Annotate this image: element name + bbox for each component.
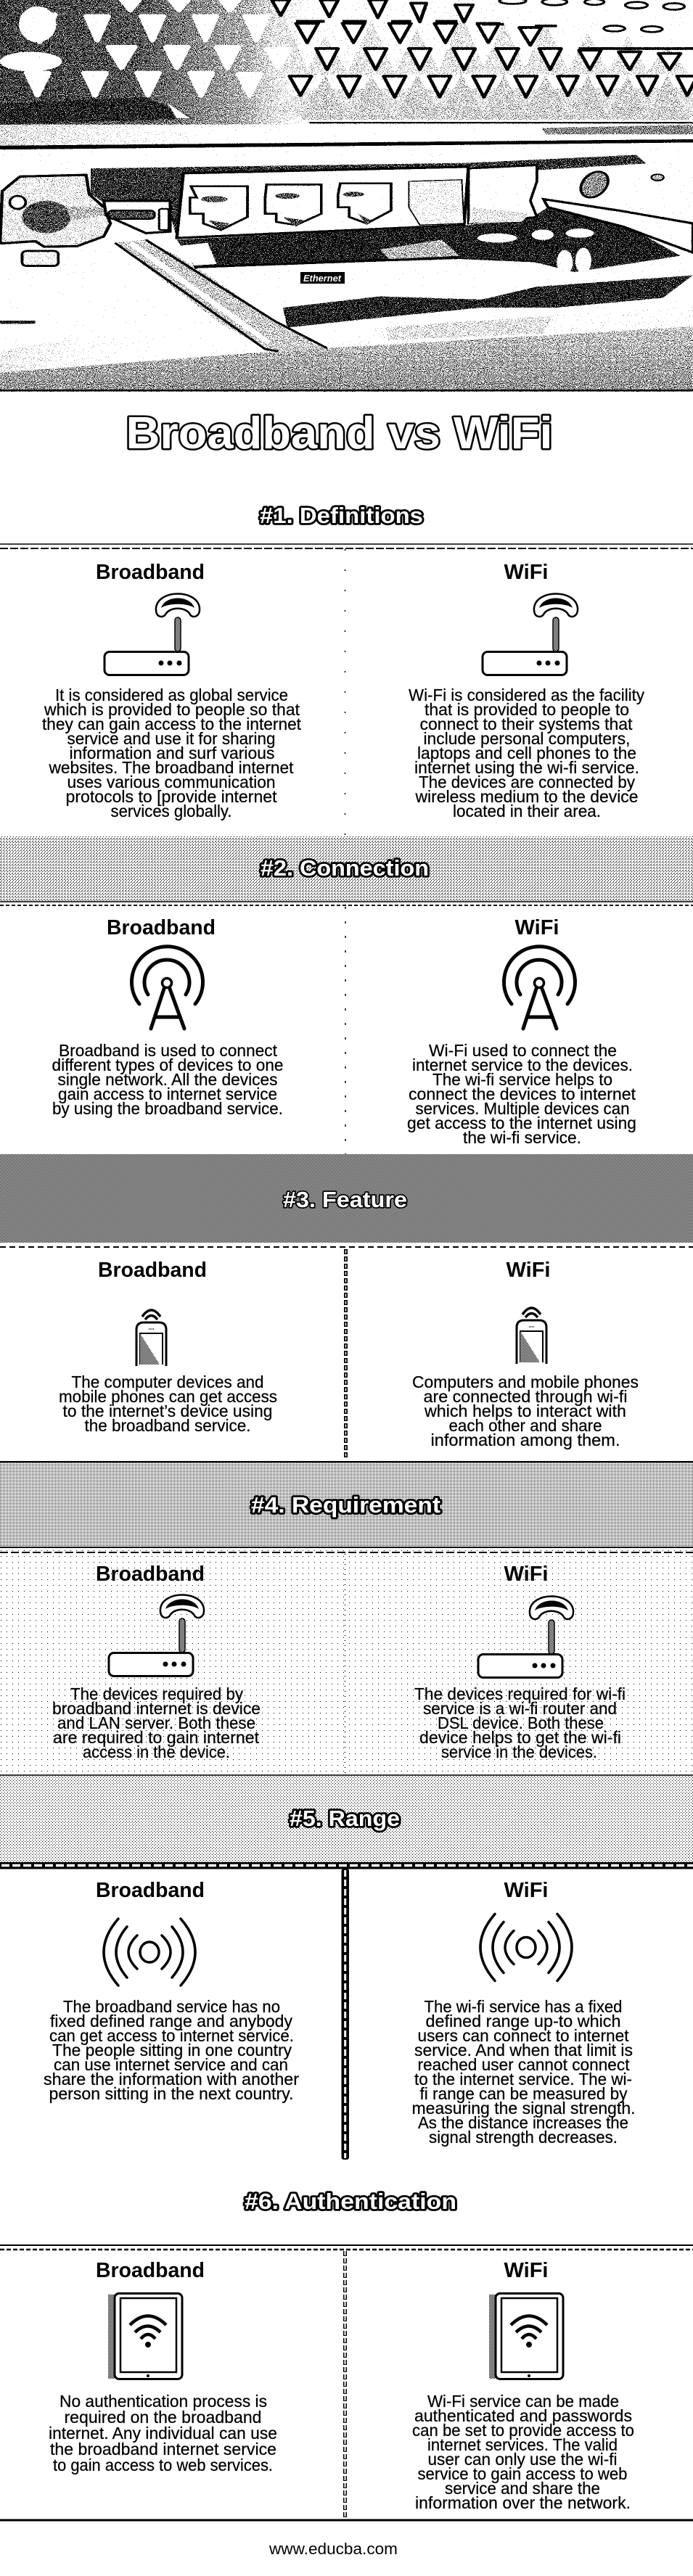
panel background: requirement bbox=[0, 1548, 693, 1775]
description text: The broadband service has no bbox=[63, 1997, 280, 2016]
section heading: Feature: #3. Feature bbox=[283, 1187, 407, 1212]
description text: can use internet service and can bbox=[54, 2055, 288, 2074]
description text: internet services. The valid bbox=[427, 2435, 618, 2454]
description text: wireless medium to the device bbox=[415, 787, 639, 806]
description text: each other and share bbox=[448, 1416, 602, 1435]
panel: connection wifi bbox=[407, 916, 636, 1147]
description text: which is provided to people so that bbox=[44, 700, 300, 719]
description text: fixed defined range and anybody bbox=[50, 2012, 292, 2030]
band: range heading background bbox=[0, 1776, 693, 1862]
description text: fi range can be measured by bbox=[419, 2084, 628, 2103]
section heading: Range: #5. Range bbox=[290, 1806, 400, 1831]
column heading: WiFi bbox=[504, 2259, 549, 2282]
description text bbox=[42, 686, 302, 820]
description text bbox=[44, 1997, 299, 2103]
band: requirement heading background bbox=[0, 1462, 693, 1547]
description text: different types of devices to one bbox=[52, 1055, 283, 1074]
description text: information over the network. bbox=[415, 2493, 631, 2512]
column heading: WiFi bbox=[504, 561, 549, 584]
band: feature heading background bbox=[0, 1154, 693, 1243]
column heading: WiFi bbox=[507, 1259, 550, 1282]
panel: range broadband bbox=[44, 1879, 299, 2103]
panel: range wifi bbox=[412, 1879, 636, 2147]
description text: service is a wi-fi router and bbox=[423, 1699, 617, 1718]
icon: wifi router bbox=[478, 1596, 573, 1677]
description text bbox=[412, 2392, 634, 2512]
description text: are required to gain internet bbox=[53, 1728, 260, 1747]
description text: service. And when that limit is bbox=[414, 2041, 633, 2059]
description text: No authentication process is bbox=[60, 2392, 267, 2411]
icon: broadcast signal bbox=[104, 1919, 195, 1986]
description text: and LAN server. Both these bbox=[57, 1713, 255, 1732]
section heading: Definitions: #1. Definitions bbox=[260, 503, 423, 528]
description text: user can only use the wi-fi bbox=[428, 2450, 617, 2469]
description text: signal strength decreases. bbox=[429, 2128, 618, 2147]
description text: authenticated and passwords bbox=[414, 2406, 632, 2425]
description text: Broadband is used to connect bbox=[59, 1041, 278, 1060]
description text: are connected through wi-fi bbox=[424, 1387, 627, 1406]
description text: gain access to internet service bbox=[58, 1085, 277, 1103]
description text: measuring the signal strength. bbox=[412, 2099, 636, 2118]
description text: to the internet service. The wi- bbox=[414, 2070, 632, 2089]
description text bbox=[409, 686, 644, 820]
description text: The wi-fi service helps to bbox=[432, 1070, 612, 1089]
description text: service and use it for sharing bbox=[67, 729, 276, 748]
column heading: Broadband bbox=[107, 916, 216, 939]
column heading: Broadband bbox=[96, 1879, 205, 1902]
description text: device helps to get the wi-fi bbox=[419, 1728, 621, 1747]
description text: that is provided to people to bbox=[425, 700, 629, 719]
description text: Wi-Fi service can be made bbox=[427, 2392, 619, 2411]
panel: requirement wifi bbox=[414, 1563, 626, 1761]
description text: the broadband internet service bbox=[50, 2440, 276, 2458]
description text: which helps to interact with bbox=[424, 1402, 626, 1420]
icon: mobile phone with signal bbox=[136, 1310, 166, 1366]
description text: internet. Any individual can use bbox=[49, 2424, 277, 2443]
icon: radio tower bbox=[504, 947, 575, 1029]
description text: connect to their systems that bbox=[419, 715, 633, 733]
icon: wifi router bbox=[109, 1594, 204, 1676]
description text: The people sitting in one country bbox=[52, 2041, 292, 2059]
icon: radio tower bbox=[132, 947, 203, 1029]
description text: information and surf various bbox=[70, 744, 274, 762]
column heading: Broadband bbox=[96, 1563, 205, 1586]
footer: website: www.educba.com bbox=[268, 2540, 398, 2558]
description text: laptops and cell phones to the bbox=[417, 744, 636, 762]
column heading: Broadband bbox=[98, 1259, 207, 1282]
panel: definitions broadband bbox=[42, 561, 302, 820]
description text: Computers and mobile phones bbox=[412, 1373, 639, 1391]
description text: the broadband service. bbox=[84, 1416, 251, 1435]
panel: feature wifi bbox=[412, 1259, 639, 1449]
description text bbox=[407, 1041, 636, 1147]
band: connection heading background bbox=[0, 836, 693, 901]
panel: authentication wifi bbox=[412, 2259, 634, 2512]
column heading: Broadband bbox=[96, 2259, 205, 2282]
description text: services globally. bbox=[110, 802, 232, 820]
description text bbox=[49, 2392, 277, 2474]
description text bbox=[52, 1684, 261, 1761]
description text: person sitting in the next country. bbox=[49, 2084, 293, 2103]
description text: access in the device. bbox=[83, 1742, 230, 1761]
description text: service and share the bbox=[445, 2479, 600, 2498]
description text bbox=[52, 1041, 283, 1118]
description text: required on the broadband bbox=[64, 2408, 262, 2427]
icon: broadcast signal bbox=[480, 1914, 572, 1980]
description text: protocols to [provide internet bbox=[65, 787, 277, 806]
description text: mobile phones can get access bbox=[59, 1387, 277, 1406]
description text: connect the devices to internet bbox=[409, 1085, 636, 1103]
title: Broadband vs WiFi bbox=[126, 408, 553, 458]
description text: internet service to the devices. bbox=[412, 1055, 633, 1074]
description text: information among them. bbox=[431, 1431, 620, 1449]
description text: reached user cannot connect bbox=[418, 2055, 630, 2074]
description text: Wi-Fi used to connect the bbox=[429, 1041, 617, 1060]
description text: The devices are connected by bbox=[419, 773, 635, 791]
description text: by using the broadband service. bbox=[52, 1099, 283, 1118]
column heading: WiFi bbox=[504, 1563, 549, 1586]
description text: can be set to provide access to bbox=[412, 2421, 634, 2440]
icon: wifi router bbox=[104, 593, 200, 675]
description text: The devices required by bbox=[70, 1684, 243, 1703]
description text: broadband internet is device bbox=[52, 1699, 261, 1718]
description text: The computer devices and bbox=[71, 1373, 264, 1391]
hero photo: router ethernet ports bbox=[0, 0, 693, 392]
description text: DSL device. Both these bbox=[438, 1713, 604, 1732]
description text: single network. All the devices bbox=[58, 1070, 277, 1089]
description text: users can connect to internet bbox=[418, 2026, 629, 2045]
description text: websites. The broadband internet bbox=[49, 758, 294, 777]
description text: they can gain access to the internet bbox=[42, 715, 302, 733]
panel: authentication broadband bbox=[49, 2259, 277, 2474]
description text bbox=[412, 1997, 636, 2147]
description text: As the distance increases the bbox=[418, 2113, 628, 2132]
icon: mobile phone with signal bbox=[517, 1308, 546, 1364]
column heading: WiFi bbox=[515, 916, 559, 939]
panel: connection broadband bbox=[52, 916, 283, 1118]
section heading: Authentication: #6. Authentication bbox=[245, 2189, 456, 2214]
panel: definitions wifi bbox=[409, 561, 644, 820]
description text: the wi-fi service. bbox=[463, 1128, 581, 1147]
description text: to gain access to web services. bbox=[53, 2456, 273, 2474]
label: Ethernet: Ethernet bbox=[303, 273, 342, 284]
description text: services. Multiple devices can bbox=[415, 1099, 630, 1118]
description text: can get access to internet service. bbox=[49, 2026, 294, 2045]
description text: uses various communication bbox=[67, 773, 276, 791]
icon: wifi router bbox=[483, 593, 578, 675]
description text: located in their area. bbox=[453, 802, 601, 820]
description text: get access to the internet using bbox=[407, 1114, 636, 1132]
description text: The devices required for wi-fi bbox=[414, 1684, 626, 1703]
section heading: Requirement: #4. Requirement bbox=[251, 1492, 440, 1518]
description text: include personal computers, bbox=[424, 729, 630, 748]
description text: share the information with another bbox=[44, 2070, 299, 2089]
description text: It is considered as global service bbox=[55, 686, 288, 704]
column heading: WiFi bbox=[504, 1879, 549, 1902]
panel: requirement broadband bbox=[52, 1563, 261, 1761]
section heading: Connection: #2. Connection bbox=[261, 855, 429, 881]
column heading: Broadband bbox=[96, 561, 205, 584]
description text: to the internet’s device using bbox=[62, 1402, 273, 1420]
icon: tablet with wifi bbox=[108, 2294, 182, 2379]
description text: service in the devices. bbox=[441, 1742, 597, 1761]
panel: feature broadband bbox=[59, 1259, 277, 1435]
description text: defined range up-to which bbox=[425, 2012, 621, 2030]
description text bbox=[59, 1373, 277, 1435]
description text bbox=[414, 1684, 626, 1761]
description text: Wi-Fi is considered as the facility bbox=[409, 686, 644, 704]
icon: tablet with wifi bbox=[489, 2294, 563, 2379]
description text: service to gain access to web bbox=[418, 2464, 627, 2483]
description text: The wi-fi service has a fixed bbox=[424, 1997, 623, 2016]
description text bbox=[412, 1373, 639, 1449]
description text: internet using the wi-fi service. bbox=[414, 758, 639, 777]
